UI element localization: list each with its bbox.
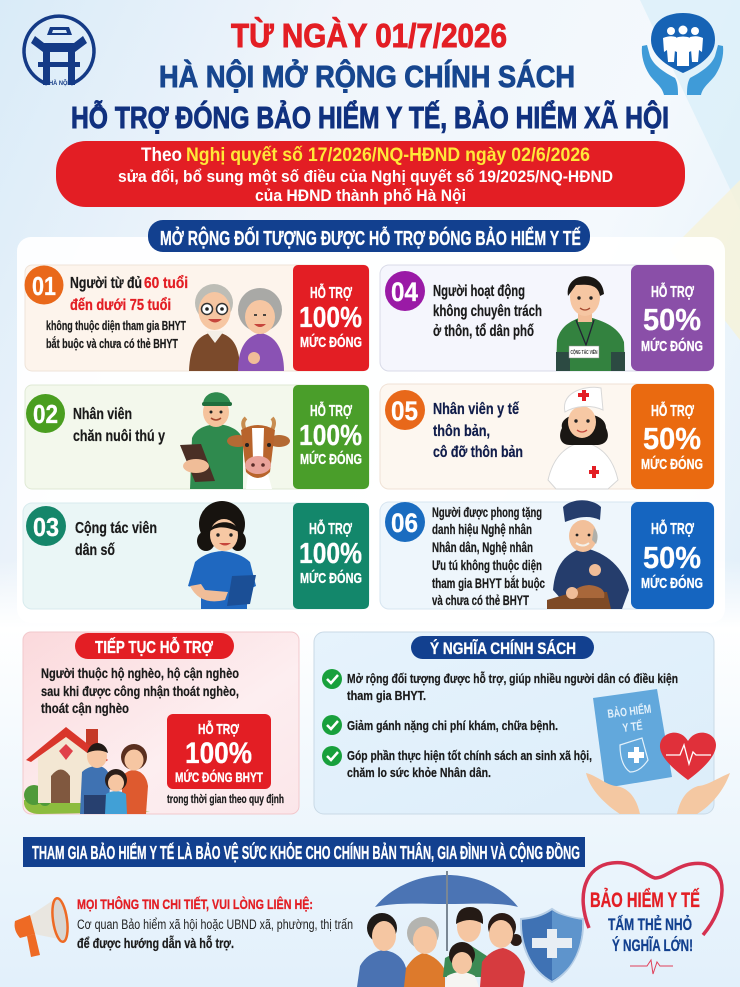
text 03: Cộng tác viên: [75, 520, 157, 537]
support box 01: 100%: [299, 302, 362, 334]
text 05: thôn bản,: [433, 423, 490, 440]
badge 01: 01: [32, 271, 56, 301]
text 04: Người hoạt động: [433, 283, 525, 300]
support box 06: 50%: [643, 540, 701, 575]
support box 06: MỨC ĐÓNG: [641, 574, 703, 592]
icon: shield with cross: [521, 909, 583, 982]
illustration: house and family: [24, 727, 150, 814]
logo: Hanoi emblem: [24, 16, 94, 87]
support box: 100%: [185, 737, 252, 770]
text 01: không thuộc diện tham gia BHYT: [46, 319, 186, 333]
resolution banner: Theo: [141, 145, 182, 166]
illustration: elderly couple: [189, 284, 284, 371]
text 05: Nhân viên y tế: [433, 401, 519, 418]
support box 01: MỨC ĐÓNG: [300, 333, 362, 351]
text 04: không chuyên trách: [433, 303, 542, 320]
resolution banner: sửa đổi, bổ sung một số điều của Nghị quyết số 19/2025/NQ-HĐND: [118, 167, 613, 186]
support box 06: [631, 502, 714, 609]
support box 05: 50%: [643, 421, 701, 456]
badge 04: 04: [391, 277, 418, 307]
card 06: [380, 500, 714, 609]
panel heading: TIẾP TỤC HỖ TRỢ: [95, 636, 213, 657]
badge 02: [26, 394, 65, 433]
note: trong thời gian theo quy định: [167, 792, 284, 806]
slogan text: [590, 889, 700, 955]
contact text: [77, 895, 353, 951]
title: TỪ NGÀY 01/7/2026: [231, 17, 507, 54]
text 02: [73, 406, 165, 445]
text 01: Người từ đủ: [70, 275, 142, 292]
badge 03: 03: [33, 512, 59, 542]
title: [71, 17, 669, 135]
support box 05: MỨC ĐÓNG: [641, 455, 703, 473]
illustration: population collaborator: [188, 501, 256, 609]
illustration: village worker: [556, 276, 625, 371]
text 02: chăn nuôi thú y: [73, 428, 165, 445]
slogan heart: [583, 863, 722, 974]
support box 06: HỖ TRỢ: [651, 519, 694, 538]
text 01: bắt buộc và chưa có thẻ BHYT: [46, 336, 178, 351]
contact text: MỌI THÔNG TIN CHI TIẾT, VUI LÒNG LIÊN HỆ:: [77, 895, 313, 912]
title: HÀ NỘI MỞ RỘNG CHÍNH SÁCH: [159, 58, 575, 94]
section heading: [148, 220, 590, 252]
text 06: Ưu tú không thuộc diện: [432, 558, 542, 573]
card 01: [24, 265, 369, 371]
badge 05: 05: [391, 396, 418, 426]
panel text: sau khi được công nhận thoát nghèo,: [41, 684, 239, 699]
illustration: veterinarian with cow: [180, 392, 290, 489]
card 04: [380, 265, 714, 371]
support box 04: MỨC ĐÓNG: [641, 337, 703, 355]
support box: HỖ TRỢ: [198, 720, 239, 738]
support box 01: HỖ TRỢ: [310, 283, 352, 302]
support box 03: MỨC ĐÓNG: [300, 569, 362, 587]
text 06: [432, 505, 545, 608]
illustration: insurance book, heart and hands: [586, 689, 730, 814]
badge 06: 06: [391, 508, 418, 538]
check item 1: [322, 669, 678, 703]
illustration: insurance book, heart and hands: Y TẾ: [622, 718, 643, 735]
panel heading: [411, 636, 594, 659]
resolution banner: Nghị quyết số 17/2026/NQ-HĐND ngày 02/6/2026: [186, 145, 590, 166]
badge 01: [24, 266, 64, 304]
text 01: 60 tuổi: [144, 274, 188, 292]
contact text: Cơ quan Bảo hiểm xã hội hoặc UBND xã, phường, thị trấn: [77, 917, 353, 932]
contact text: để được hướng dẫn và hỗ trợ.: [77, 936, 234, 951]
badge 04: [385, 271, 425, 311]
panel: policy significance: [314, 632, 730, 814]
text 06: danh hiệu Nghệ nhân: [432, 522, 532, 537]
support box 02: [293, 385, 369, 489]
support box 05: [631, 384, 714, 489]
check item 1: tham gia BHYT.: [347, 688, 426, 703]
support box 05: HỖ TRỢ: [651, 401, 694, 420]
text 02: Nhân viên: [73, 406, 132, 423]
card 03: [23, 501, 369, 609]
illustration: artisan at pottery wheel: [547, 500, 629, 609]
support box 04: [631, 265, 714, 371]
text 03: [75, 520, 157, 559]
panel text: thoát cận nghèo: [41, 701, 129, 716]
illustration: family under umbrella: [357, 871, 525, 987]
support box 04: HỖ TRỢ: [651, 282, 694, 301]
text 06: và chưa có thẻ BHYT: [432, 593, 530, 608]
card 02: [25, 385, 369, 489]
panel text: Người thuộc hộ nghèo, hộ cận nghèo: [41, 666, 239, 681]
illustration: village worker: CỘNG TÁC VIÊN: [570, 348, 598, 356]
panel text: [41, 666, 239, 716]
check item 2: [322, 715, 558, 735]
panel heading: Ý NGHĨA CHÍNH SÁCH: [430, 638, 576, 658]
slogan text: Ý NGHĨA LỚN!: [612, 935, 693, 955]
card 05: [380, 384, 714, 489]
illustration: nurse: [548, 387, 618, 489]
panel: continued support: [23, 632, 299, 814]
text 06: tham gia BHYT bắt buộc: [432, 576, 545, 591]
check item 3: Góp phần thực hiện tốt chính sách an sinh xã hội,: [347, 748, 592, 763]
text 03: dân số: [75, 542, 115, 559]
check item 2: Giảm gánh nặng chi phí khám, chữa bệnh.: [347, 718, 558, 733]
logo: Hanoi emblem: HÀ NỘI: [49, 79, 69, 87]
text 01: đến dưới 75 tuổi: [70, 296, 171, 314]
badge 03: [26, 506, 66, 546]
support box 03: [293, 503, 369, 609]
text 05: [433, 401, 523, 461]
support box 03: 100%: [299, 538, 362, 570]
check item 3: [322, 746, 592, 780]
resolution banner: của HĐND thành phố Hà Nội: [255, 186, 466, 205]
support box: [167, 714, 271, 789]
support box 01: [293, 265, 369, 371]
text 04: ở thôn, tổ dân phố: [433, 323, 534, 340]
slogan text: TẤM THẺ NHỎ: [608, 915, 692, 934]
icon: megaphone: [15, 897, 70, 957]
illustration: insurance book, heart and hands: BẢO HIỂM: [607, 701, 652, 721]
support box 04: 50%: [643, 302, 701, 337]
text 01: [46, 274, 188, 351]
text 04: [433, 283, 542, 340]
badge 06: [385, 502, 425, 542]
badge 02: 02: [33, 399, 58, 429]
check item 3: chăm lo sức khỏe Nhân dân.: [347, 765, 491, 780]
white content panel: [17, 237, 725, 623]
logo: family in caring hands: [642, 13, 723, 95]
support box: MỨC ĐÓNG BHYT: [175, 768, 263, 785]
support box 02: MỨC ĐÓNG: [300, 450, 362, 468]
text 06: Người được phong tặng: [432, 505, 542, 520]
section heading: MỞ RỘNG ĐỐI TƯỢNG ĐƯỢC HỖ TRỢ ĐÓNG BẢO HIỂM Y TẾ: [160, 226, 581, 250]
badge 05: [385, 390, 425, 430]
resolution banner: [56, 141, 685, 207]
support box 02: 100%: [299, 420, 362, 452]
support box 02: HỖ TRỢ: [310, 401, 352, 420]
panel heading: [75, 633, 234, 659]
slogan banner: [23, 837, 585, 867]
text 05: cô đỡ thôn bản: [433, 444, 523, 461]
text 06: Nhân dân, Nghệ nhân: [432, 540, 533, 555]
support box 03: HỖ TRỢ: [309, 519, 352, 538]
